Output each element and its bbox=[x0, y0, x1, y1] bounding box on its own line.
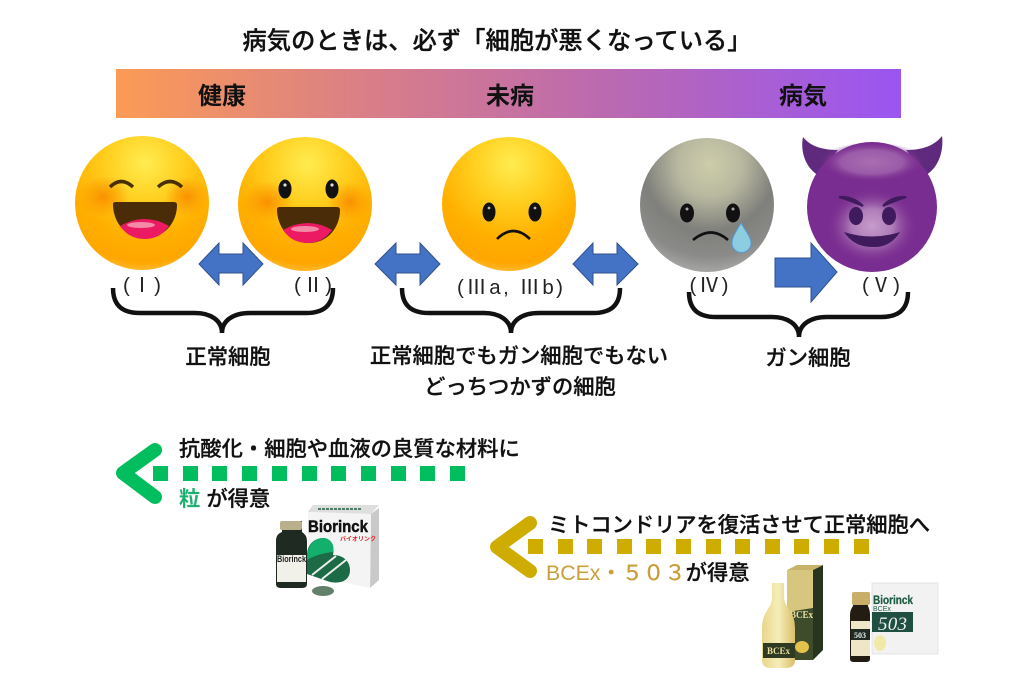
arrow: IV to V bbox=[775, 243, 837, 302]
product photo: Biorinck BCEx 503 box and bottle: 503 bbox=[854, 631, 866, 640]
brace: normal cells bbox=[113, 288, 333, 333]
caption: undetermined cells bbox=[370, 344, 668, 399]
stage label: pre-symptomatic: 未病 bbox=[486, 83, 534, 110]
product photo: Biorinck BCEx 503 box and bottle: Biorinck bbox=[873, 593, 913, 607]
brace: cancer cells bbox=[689, 292, 908, 337]
title: 病気のときは、必ず「細胞が悪くなっている」 bbox=[242, 28, 752, 55]
label: I: (Ⅰ) bbox=[123, 274, 161, 297]
caption: undetermined cells: どっちつかずの細胞 bbox=[424, 375, 616, 399]
brace: undetermined cells bbox=[402, 288, 620, 333]
product photo: BCEx bottle and box: BCEx bbox=[790, 610, 813, 621]
arrow: II to III both ways bbox=[375, 243, 440, 285]
caption: normal cells: 正常細胞 bbox=[185, 345, 271, 369]
text: grain is good at: 粒 が得意 bbox=[179, 487, 270, 511]
product photo: BCEx bottle and box: BCEx bbox=[767, 646, 791, 656]
label: IV: (Ⅳ) bbox=[690, 274, 728, 297]
product photo: Biorinck BCEx 503 box and bottle bbox=[850, 583, 938, 662]
product photo: Biorinck box and bottle bbox=[276, 505, 379, 596]
callout: gold BCEx product bbox=[497, 513, 930, 585]
caption: undetermined cells: 正常細胞でもガン細胞でもない bbox=[370, 344, 668, 368]
icon: smiling face (II) bbox=[238, 137, 372, 271]
icon: purple devil face (V) bbox=[802, 136, 942, 272]
text: revive mitochondria: ミトコンドリアを復活させて正常細胞へ bbox=[548, 513, 930, 537]
arrow: I to II both ways bbox=[199, 243, 263, 285]
icon: green dotted arrow bbox=[123, 450, 465, 497]
icon: laughing face (I) bbox=[75, 136, 209, 270]
stage label: disease: 病気 bbox=[779, 83, 827, 110]
product photo: Biorinck box and bottle: Biorinck bbox=[308, 517, 368, 536]
icon: gray crying face (IV) bbox=[640, 138, 774, 272]
text: antioxidant material: 抗酸化・細胞や血液の良質な材料に bbox=[179, 437, 520, 461]
label: IIIa, IIIb: (Ⅲa, Ⅲb) bbox=[457, 276, 563, 299]
label: V: (Ⅴ) bbox=[862, 274, 900, 297]
label: II: (Ⅱ) bbox=[294, 274, 332, 297]
icon: gold dotted arrow bbox=[497, 523, 869, 571]
product photo: Biorinck box and bottle: バイオリンク bbox=[340, 535, 376, 543]
caption: cancer cells: ガン細胞 bbox=[765, 346, 851, 370]
text: BCEx 503 is good at: BCEx・５０３が得意 bbox=[546, 561, 750, 585]
callout: green grain product bbox=[123, 437, 520, 511]
stage label: healthy: 健康 bbox=[198, 83, 246, 110]
product photo: BCEx bottle and box bbox=[762, 565, 823, 668]
product photo: Biorinck box and bottle: Biorinck bbox=[277, 554, 307, 564]
arrow: III to IV both ways bbox=[573, 243, 638, 285]
product photo: Biorinck BCEx 503 box and bottle: 503 bbox=[878, 614, 907, 635]
gradient stage bar bbox=[116, 69, 901, 118]
icon: frowning face (III) bbox=[442, 137, 576, 271]
product photo: Biorinck BCEx 503 box and bottle: BCEx bbox=[873, 606, 891, 613]
